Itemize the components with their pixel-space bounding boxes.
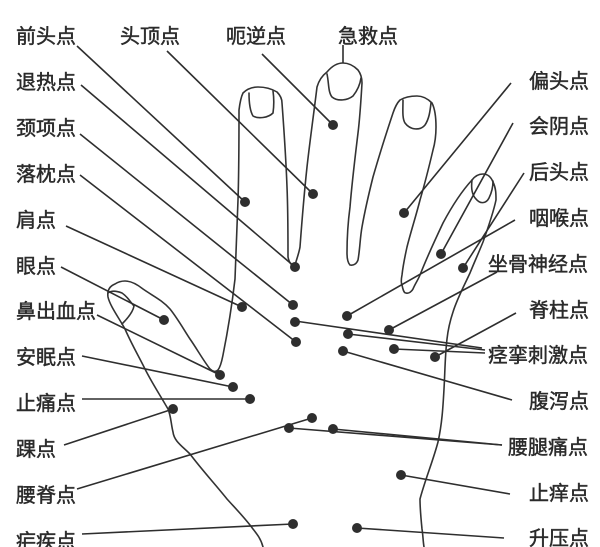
left labels: 腰脊点 [16,484,76,507]
right labels: 咽喉点 [529,207,589,230]
leader lines [61,45,524,538]
left labels: 落枕点 [16,163,76,186]
left labels: 安眠点 [16,346,76,369]
hand outline [108,63,496,547]
top labels: 急救点 [338,25,398,48]
top labels: 前头点 [16,25,76,48]
right labels [488,70,589,547]
top labels: 头顶点 [120,25,180,48]
right labels: 腰腿痛点 [508,436,588,459]
left labels: 肩点 [16,209,56,232]
left labels: 鼻出血点 [16,300,96,323]
left labels: 退热点 [16,71,76,94]
left labels [16,71,96,547]
right labels: 痉挛刺激点 [488,344,588,367]
right labels: 会阴点 [529,115,589,138]
right labels: 偏头点 [529,70,589,93]
acupoint dots [159,120,468,533]
left labels: 止痛点 [16,392,76,415]
top labels: 呃逆点 [226,25,286,48]
right labels: 坐骨神经点 [488,253,588,276]
right labels: 止痒点 [529,482,589,505]
left labels: 颈项点 [16,117,76,140]
top labels [16,25,398,48]
left labels: 眼点 [16,255,56,278]
right labels: 腹泻点 [529,390,589,413]
fingernails [108,74,493,324]
right labels: 后头点 [529,161,589,184]
left labels: 踝点 [16,438,56,461]
right labels: 脊柱点 [529,299,589,322]
